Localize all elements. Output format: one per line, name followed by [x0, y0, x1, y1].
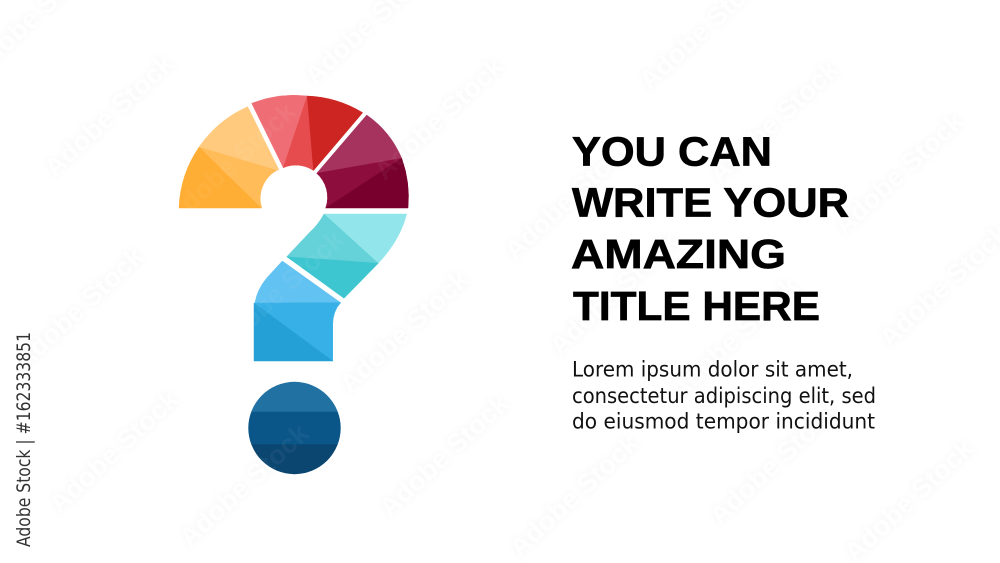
- watermark over graphic: Adobe Stock: [208, 224, 350, 359]
- question mark graphic: [179, 95, 409, 478]
- watermark pattern: Adobe Stock: [38, 48, 180, 183]
- segment: maroon: [317, 115, 409, 208]
- watermark pattern: Adobe Stock: [703, 396, 845, 531]
- watermark pattern: Adobe Stock: [498, 131, 640, 266]
- title: AMAZING: [571, 231, 786, 277]
- segment: teal: [287, 214, 407, 298]
- watermark pattern: Adobe Stock: [373, 388, 515, 523]
- title: WRITE YOUR: [572, 180, 849, 226]
- title: TITLE HERE: [573, 283, 820, 329]
- watermark pattern: Adobe Stock: [503, 428, 645, 563]
- watermark over graphic: Adobe Stock: [368, 51, 510, 186]
- stock id label: Adobe Stock | #162333851: [13, 332, 35, 547]
- watermark over graphic: [160, 51, 510, 553]
- watermark pattern: Adobe Stock: [828, 106, 970, 241]
- watermark pattern: Adobe Stock: [333, 264, 475, 399]
- watermark over graphic: Adobe Stock: [173, 418, 315, 553]
- watermark pattern: Adobe Stock: [8, 241, 150, 376]
- segment: blue: [254, 261, 341, 361]
- watermark pattern: Adobe Stock: [543, 226, 685, 361]
- title: [571, 128, 849, 329]
- watermark over graphic: Adobe Stock: [160, 96, 302, 231]
- watermark pattern: Adobe Stock: [173, 418, 315, 553]
- body text: [572, 358, 876, 434]
- watermark pattern: Adobe Stock: [368, 51, 510, 186]
- watermark pattern: Adobe Stock: [703, 54, 845, 189]
- segment: orange: [179, 107, 279, 208]
- dot: [248, 382, 341, 474]
- watermark pattern: Adobe Stock: [663, 271, 805, 406]
- title: YOU CAN: [572, 128, 772, 174]
- body text: Lorem ipsum dolor sit amet,: [572, 358, 853, 382]
- watermark pattern: Adobe Stock: [43, 384, 185, 519]
- segment: red: [252, 95, 363, 170]
- body text: consectetur adipiscing elit, sed: [572, 384, 876, 408]
- body text: do eiusmod tempor incididunt: [572, 410, 875, 434]
